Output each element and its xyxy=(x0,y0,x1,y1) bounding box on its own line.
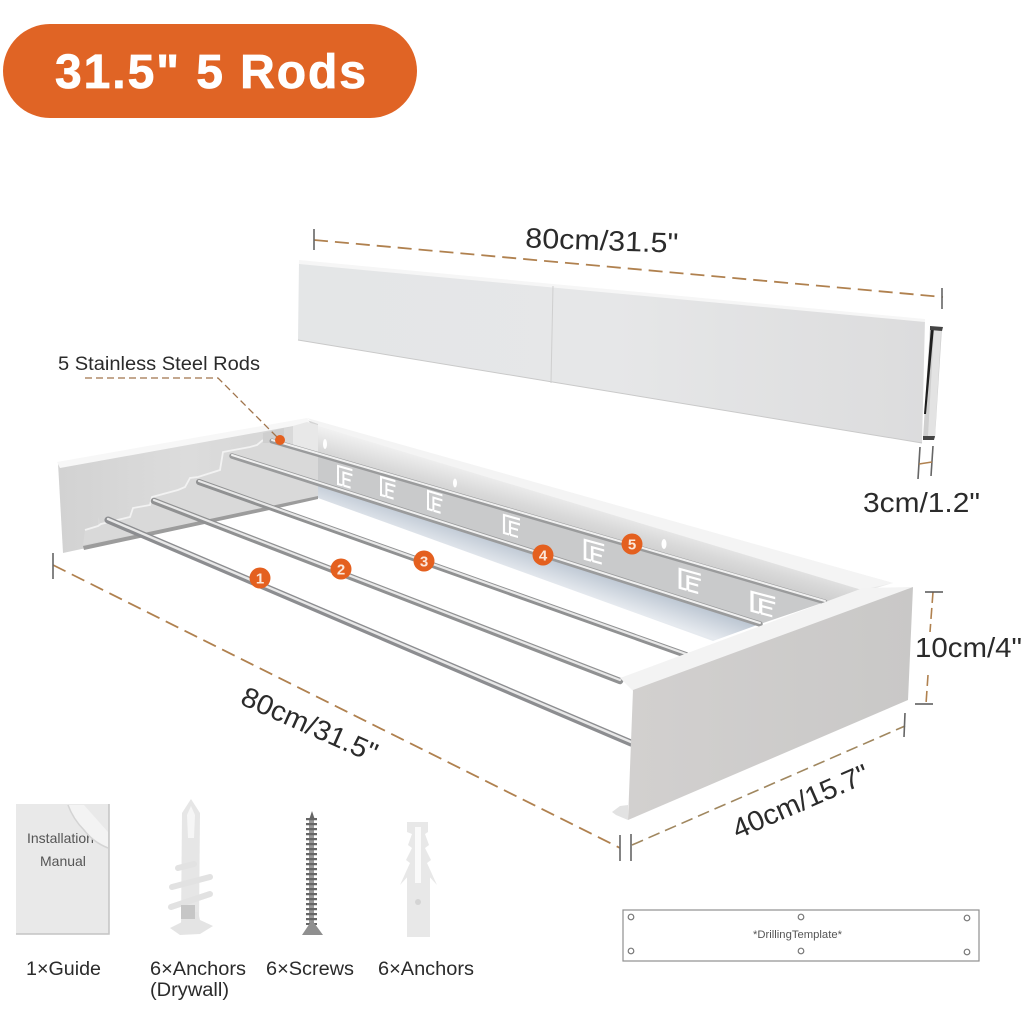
accessory labels: 6×Anchors xyxy=(378,959,474,980)
numbered badges: 3 xyxy=(420,554,428,570)
dimension: bar length: 80cm/31.5" xyxy=(525,222,679,259)
rack frame xyxy=(57,418,893,641)
rod 4 xyxy=(232,455,760,624)
icon: installation manual: Installation xyxy=(27,830,94,846)
accessory labels: (Drywall) xyxy=(150,980,229,1001)
accessory labels xyxy=(26,959,474,1001)
drilling template xyxy=(623,910,979,961)
numbered badges: 5 xyxy=(628,536,636,554)
icon: installation manual xyxy=(16,804,109,934)
title badge: 31.5" 5 Rods xyxy=(55,46,366,99)
dimension: rack depth: 40cm/15.7" xyxy=(727,758,874,845)
icon: installation manual: Manual xyxy=(40,853,86,869)
dimension: bar depth xyxy=(863,446,980,518)
rod 3 xyxy=(199,481,686,655)
mounting holes xyxy=(323,439,666,549)
dimension: rack depth xyxy=(631,713,905,861)
rods xyxy=(108,440,825,743)
dimension: rack height: 10cm/4" xyxy=(915,632,1022,663)
dimension: rack length: 80cm/31.5" xyxy=(237,681,383,769)
dimension: rack length xyxy=(53,553,620,861)
icon: screw xyxy=(302,811,323,935)
folded rack bar xyxy=(298,260,943,443)
dimension: bar length xyxy=(314,222,943,309)
accessory labels: 1×Guide xyxy=(26,959,101,980)
accessory labels: 6×Anchors xyxy=(150,959,246,980)
accessory labels: 6×Screws xyxy=(266,959,354,980)
callout: stainless steel rods xyxy=(58,354,285,445)
back panel middle strip xyxy=(318,455,825,624)
back panel lower blue band xyxy=(318,484,760,641)
numbered badges: 1 xyxy=(256,570,264,588)
rod 5 xyxy=(272,440,825,602)
front end panel xyxy=(612,587,913,820)
rod 1 xyxy=(108,519,631,743)
numbered badges xyxy=(250,534,642,588)
stepped rod holder xyxy=(83,425,318,545)
icon: drywall anchor xyxy=(170,799,213,935)
icon: wall plug anchor xyxy=(400,822,437,937)
numbered badges: 4 xyxy=(539,548,548,564)
numbered badges: 2 xyxy=(337,562,345,578)
brand marks on back panel xyxy=(338,466,775,617)
callout: stainless steel rods: 5 Stainless Steel Rods xyxy=(58,354,260,375)
dimension: bar depth: 3cm/1.2" xyxy=(863,487,980,518)
back panel top band xyxy=(307,420,893,603)
back panel top flange xyxy=(307,418,893,590)
rod 2 xyxy=(154,500,620,681)
dimension: rack height xyxy=(915,592,1022,704)
title badge xyxy=(3,24,417,118)
left wall bracket xyxy=(58,420,318,553)
drilling template: *DrillingTemplate* xyxy=(753,929,843,941)
